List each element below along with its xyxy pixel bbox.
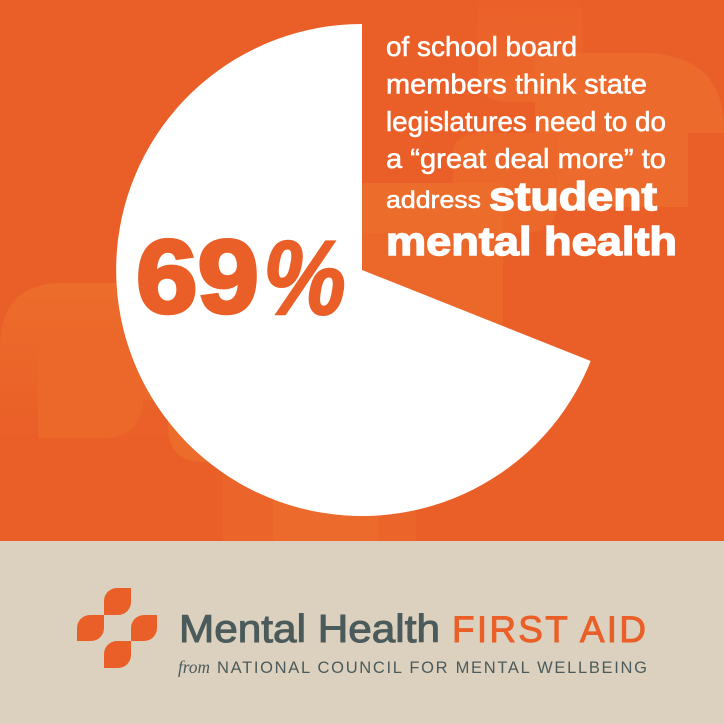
logo wordmark <box>178 608 647 677</box>
logo wordmark: Mental Health <box>179 608 440 651</box>
footer band <box>0 541 724 724</box>
statistic: 69%: % <box>263 219 346 337</box>
statistic: 69% <box>136 219 346 337</box>
icon: Mental Health First Aid cross <box>77 588 157 668</box>
text block: school board members statement: members think state <box>386 68 647 100</box>
statistic: 69%: 69 <box>136 220 259 336</box>
logo wordmark: from <box>178 657 210 677</box>
logo wordmark: FIRST AID <box>452 609 646 650</box>
text block: school board members statement: of school board <box>386 31 577 62</box>
text block: school board members statement: address <box>386 187 481 214</box>
text block: school board members statement <box>386 31 677 264</box>
text block: school board members statement: legislatures need to do <box>386 106 666 137</box>
logo wordmark: NATIONAL COUNCIL FOR MENTAL WELLBEING <box>217 659 647 677</box>
text block: school board members statement: a “great deal more” to <box>386 143 666 174</box>
text block: school board members statement: mental health <box>386 220 677 264</box>
text block: school board members statement: student <box>489 175 657 219</box>
pie chart: 69 percent <box>116 24 591 516</box>
